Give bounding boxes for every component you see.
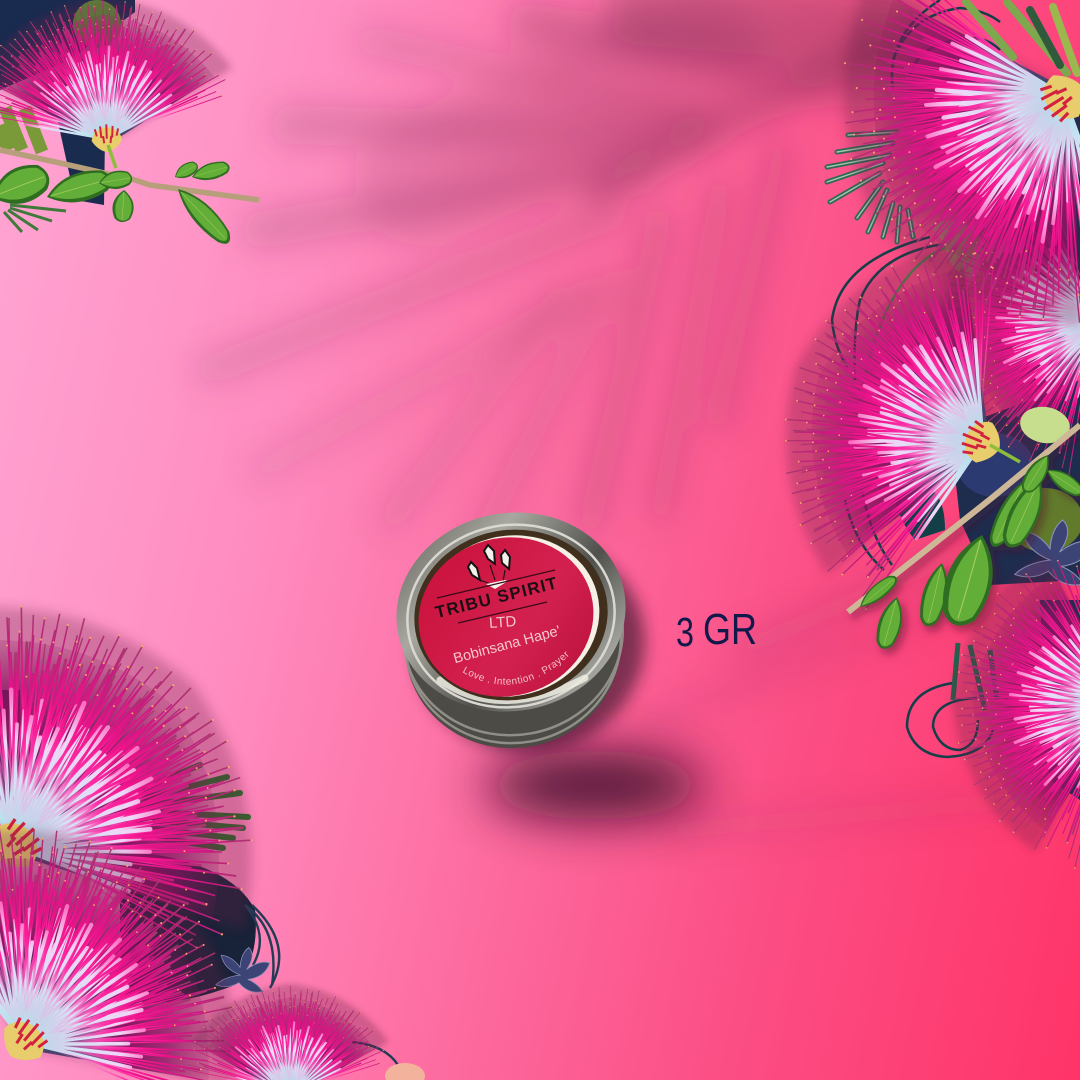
flower: bottom left lower — [0, 712, 334, 1080]
label white backing — [402, 515, 618, 717]
background palm shadow — [210, 10, 1080, 830]
flower stem — [108, 145, 116, 168]
jar rim — [381, 495, 641, 729]
flower: far right middle — [923, 167, 1080, 495]
branch — [0, 150, 259, 200]
pale leaf — [1017, 403, 1073, 447]
flower stem right — [990, 445, 1020, 462]
mossy patch — [1007, 488, 1080, 552]
front rim glare — [440, 678, 585, 701]
palm frond — [827, 132, 913, 242]
curled stems — [245, 905, 398, 1065]
blue succulent cluster — [957, 433, 1033, 497]
rim highlight — [393, 508, 629, 724]
flower: bottom left upper — [0, 479, 365, 1069]
succulents — [216, 948, 270, 992]
dark foliage backing — [950, 100, 1080, 800]
dark spike leaves — [953, 643, 997, 710]
cluster: top left flower and branch — [0, 0, 259, 250]
dark foliage backing — [0, 0, 135, 205]
jar threads — [387, 513, 639, 760]
LTD text: LTD — [489, 613, 517, 632]
green stems — [0, 108, 42, 152]
cluster: bottom left flowers — [0, 479, 425, 1080]
leaves — [0, 158, 236, 250]
green bud — [73, 0, 121, 48]
brown pods — [930, 220, 985, 278]
label rules — [437, 570, 555, 623]
branch with leaves — [848, 425, 1080, 652]
weight label — [676, 605, 757, 655]
label — [401, 518, 611, 716]
weight number: 3 — [676, 609, 694, 655]
flower: bottom center — [172, 974, 396, 1080]
brand name: TRIBU SPIRIT — [433, 573, 560, 622]
small peach bud — [385, 1063, 425, 1080]
shadow: beside jar — [398, 521, 662, 769]
product jar — [396, 512, 626, 748]
teal striped foliage — [893, 485, 945, 540]
product name: Bobinsana Hape' — [452, 623, 562, 667]
curled stems — [832, 0, 1000, 757]
succulent — [1015, 520, 1080, 585]
flower: top left — [0, 0, 246, 189]
jar cast shadows — [398, 521, 705, 819]
tagline — [462, 642, 582, 685]
cluster: right side flowers — [699, 0, 1080, 886]
jar body — [389, 525, 637, 765]
powder interior — [401, 514, 621, 716]
palm frond — [140, 765, 248, 848]
brand icon: feathers — [468, 545, 510, 589]
weight unit: GR — [703, 605, 757, 654]
palm fragment — [4, 205, 66, 232]
dark foliage backing — [0, 690, 256, 1003]
flower: upper right — [741, 0, 1080, 432]
flower: middle right — [699, 180, 1080, 666]
flower: lower right — [931, 537, 1080, 886]
shadow: ground — [485, 751, 705, 819]
green palm crown — [966, 2, 1077, 73]
tagline text: Love . Intention . Prayer — [462, 651, 568, 685]
